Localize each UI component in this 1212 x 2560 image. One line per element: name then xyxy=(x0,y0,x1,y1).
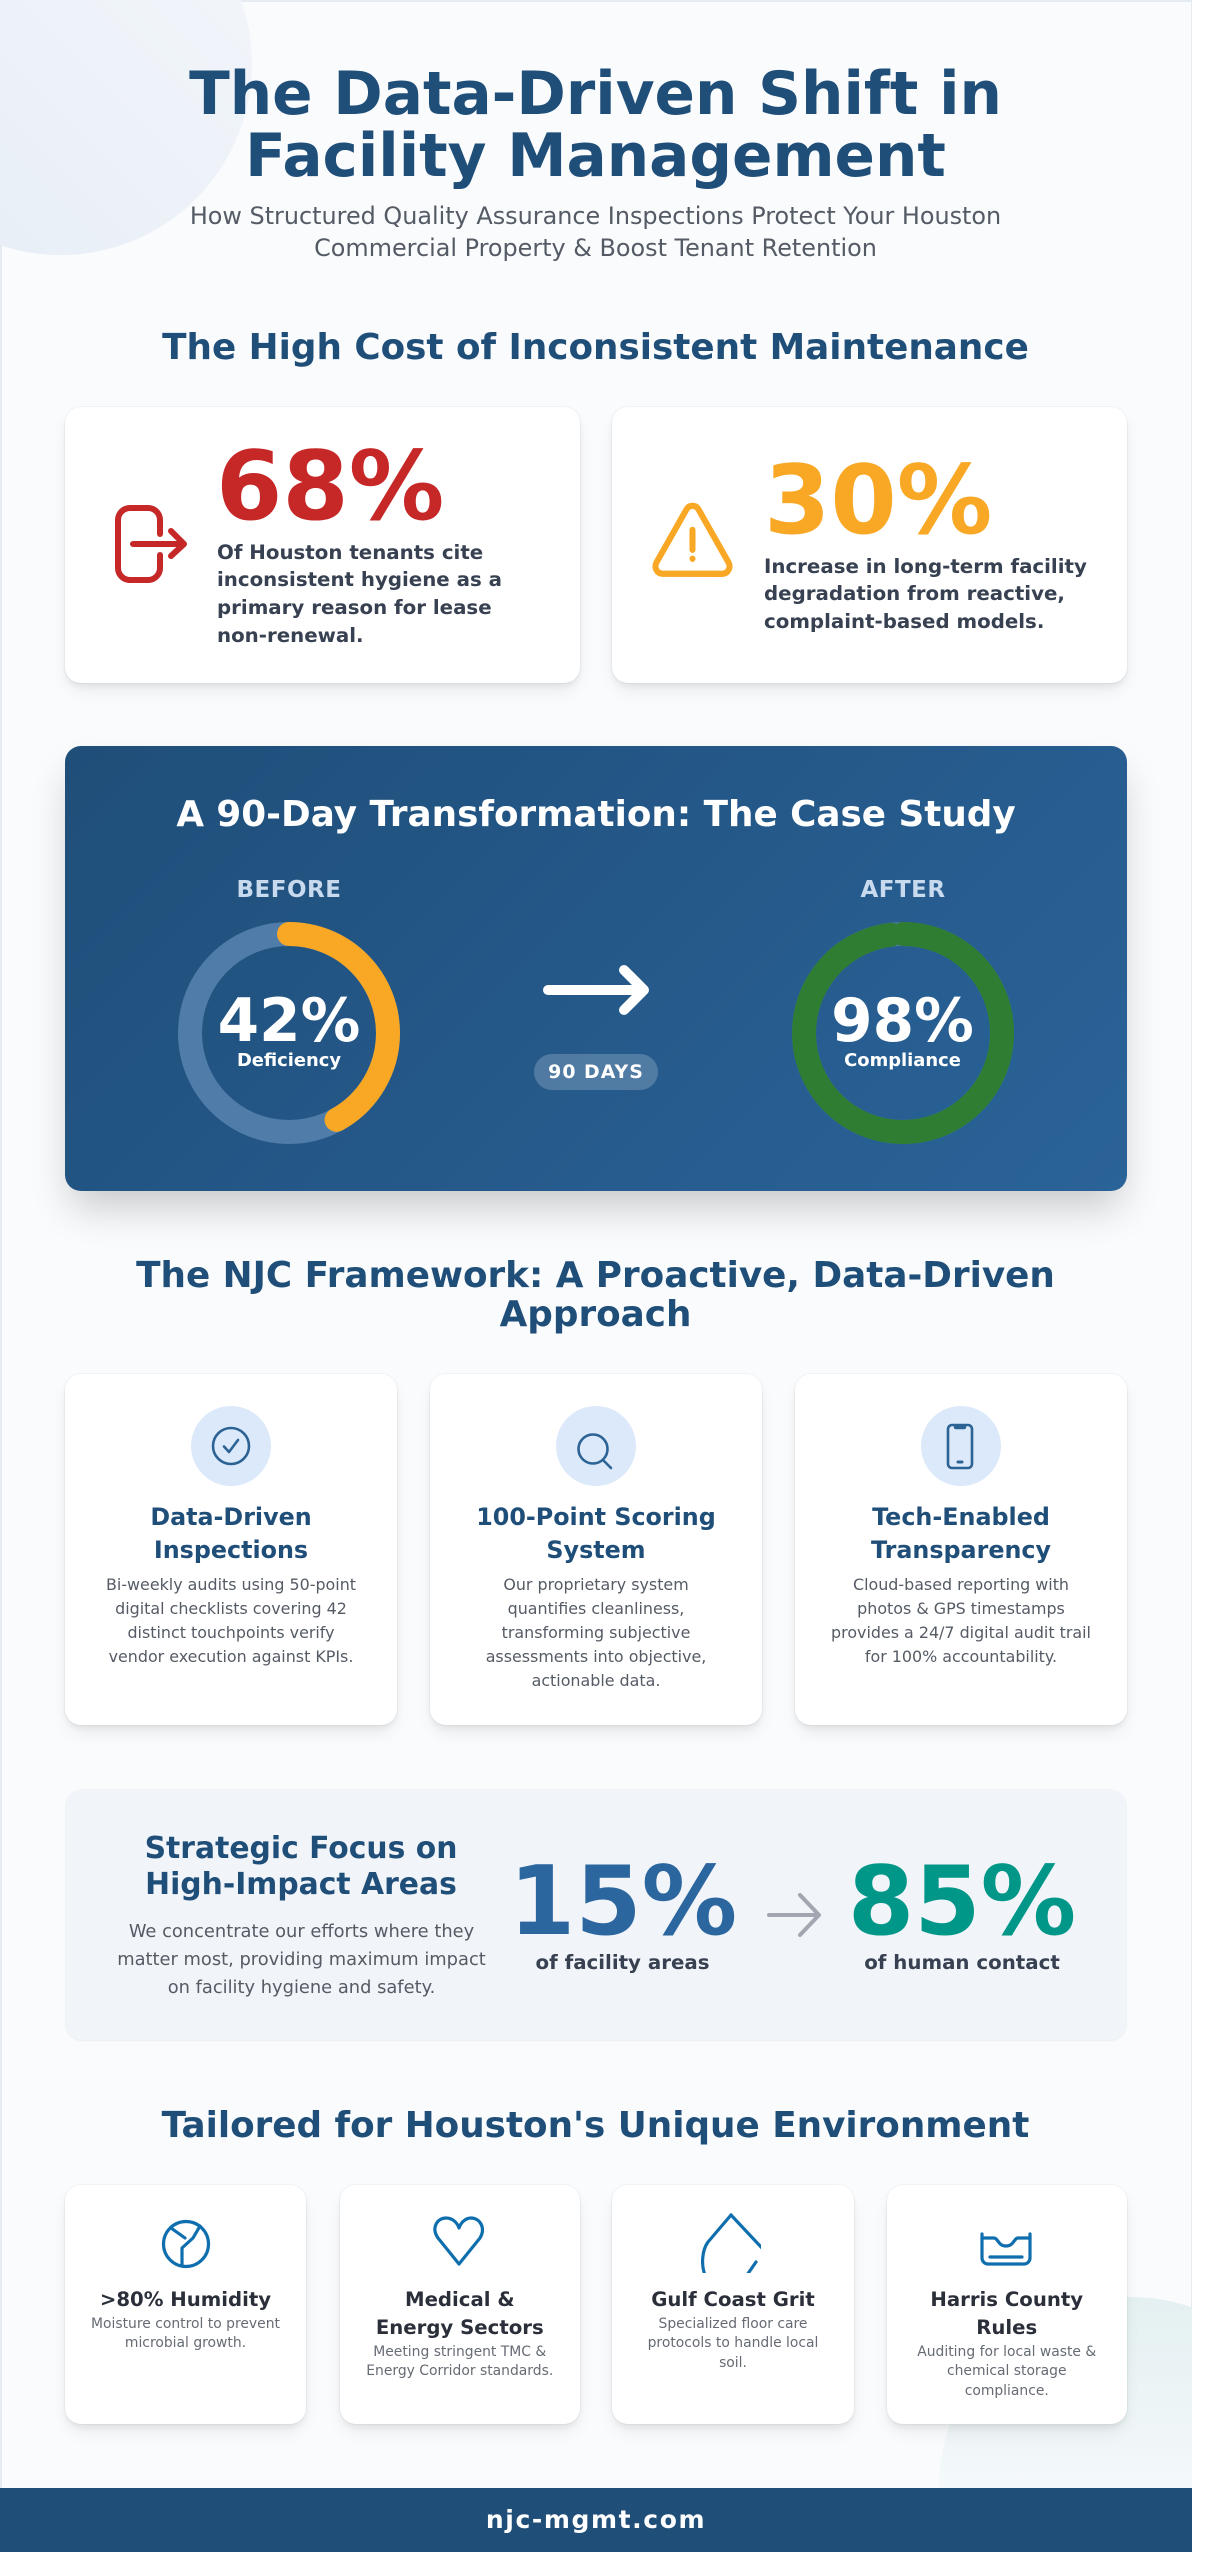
stat description: degradation from reactive, xyxy=(764,582,1065,605)
90 days pill xyxy=(534,1054,658,1090)
stat description: non-renewal. xyxy=(217,624,364,647)
before value: 42% xyxy=(218,986,360,1056)
panel: sectors xyxy=(340,2185,580,2424)
heading: framework xyxy=(136,1255,1055,1335)
icon: container xyxy=(980,2232,1032,2266)
stat description: primary reason for lease xyxy=(217,596,492,619)
card title: Harris County xyxy=(930,2288,1083,2311)
card text xyxy=(831,1575,1091,1666)
card title xyxy=(150,1503,312,1564)
card text: Moisture control to prevent xyxy=(91,2316,280,2332)
card text: protocols to handle local xyxy=(648,2335,818,2351)
icon: clipped water drop xyxy=(701,2213,761,2273)
panel: gulf coast xyxy=(612,2185,854,2424)
card text xyxy=(106,1575,356,1666)
heading: houston: Tailored for Houston's Unique Environment xyxy=(162,2104,1029,2146)
card text: Bi-weekly audits using 50-point xyxy=(106,1575,356,1594)
card title: System xyxy=(546,1536,646,1564)
card title: Gulf Coast Grit xyxy=(651,2288,815,2311)
footer: njc-mgmt.com xyxy=(486,2505,706,2534)
heading: framework: The NJC Framework: A Proactive, Data-Driven xyxy=(136,1255,1055,1296)
panel: county rules xyxy=(886,2185,1127,2424)
subtitle: How Structured Quality Assurance Inspections Protect Your Houston xyxy=(190,202,1001,230)
card text: chemical storage xyxy=(947,2363,1067,2379)
icon: heart xyxy=(433,2216,484,2266)
card text: Our proprietary system xyxy=(503,1575,689,1594)
stat description xyxy=(764,555,1087,633)
card text: actionable data. xyxy=(532,1671,660,1690)
heading: framework: Approach xyxy=(500,1294,691,1335)
card text xyxy=(648,2316,818,2371)
card title: Energy Sectors xyxy=(376,2316,544,2339)
card title xyxy=(376,2288,544,2339)
card text: Energy Corridor standards. xyxy=(366,2363,553,2379)
card title: Inspections xyxy=(154,1536,308,1564)
case study heading: A 90-Day Transformation: The Case Study xyxy=(176,794,1016,835)
card text xyxy=(366,2344,553,2379)
stat description: inconsistent hygiene as a xyxy=(217,568,502,591)
footer xyxy=(0,2488,1192,2552)
panel: data-driven inspections xyxy=(65,1374,397,1725)
icon: magnifier xyxy=(556,1406,636,1486)
panel: humidity xyxy=(65,2185,306,2424)
strategic text: matter most, providing maximum impact xyxy=(117,1949,486,1970)
card text: vendor execution against KPIs. xyxy=(109,1647,353,1666)
card title xyxy=(871,1503,1051,1564)
card text: photos & GPS timestamps xyxy=(857,1599,1065,1618)
90 days pill: 90 DAYS xyxy=(548,1060,644,1082)
icon: check circle xyxy=(191,1406,271,1486)
panel: strategic focus xyxy=(66,1790,1126,2040)
subtitle xyxy=(190,202,1001,262)
card title: Data-Driven xyxy=(150,1503,312,1531)
before label: BEFORE xyxy=(237,876,341,902)
title xyxy=(189,60,1002,191)
card title: Medical & xyxy=(405,2288,514,2311)
card text: distinct touchpoints verify xyxy=(127,1623,335,1642)
card text xyxy=(917,2344,1096,2399)
stat description: complaint-based models. xyxy=(764,610,1044,633)
card title xyxy=(930,2288,1083,2339)
icon: exit door xyxy=(115,505,187,583)
stat 85%: 85% xyxy=(848,1846,1076,1956)
decorative circle bottom-right xyxy=(939,2297,1212,2560)
stat description: Increase in long-term facility xyxy=(764,555,1087,578)
card title: 100-Point Scoring xyxy=(476,1503,716,1531)
icon: warning triangle xyxy=(652,502,733,577)
card text: digital checklists covering 42 xyxy=(115,1599,347,1618)
strategic heading xyxy=(145,1831,457,1902)
stat 15%: 15% xyxy=(509,1846,737,1956)
strategic text: We concentrate our efforts where they xyxy=(129,1921,474,1942)
stat 85% label: of human contact xyxy=(864,1951,1060,1974)
panel: scoring system xyxy=(430,1374,762,1725)
panel: case study xyxy=(65,746,1127,1191)
strategic heading: Strategic Focus on xyxy=(145,1831,457,1866)
after caption: Compliance xyxy=(844,1050,961,1071)
after label: AFTER xyxy=(860,876,946,902)
panel: transparency xyxy=(795,1374,1127,1725)
after value: 98% xyxy=(831,986,974,1056)
card text: assessments into objective, xyxy=(486,1647,706,1666)
strategic text: on facility hygiene and safety. xyxy=(168,1977,435,1998)
before caption: Deficiency xyxy=(237,1050,341,1071)
panel: tenants stat card xyxy=(65,407,580,683)
card text: Specialized floor care xyxy=(659,2316,807,2332)
card text: microbial growth. xyxy=(125,2335,246,2351)
icon: phone xyxy=(921,1406,1001,1486)
card text: Cloud-based reporting with xyxy=(853,1575,1069,1594)
card title: >80% Humidity xyxy=(100,2288,271,2311)
card text: soil. xyxy=(719,2355,747,2371)
card title: Tech-Enabled xyxy=(872,1503,1050,1531)
card title: Rules xyxy=(976,2316,1037,2339)
arrow xyxy=(543,965,649,1015)
donut: before 42% xyxy=(178,922,400,1144)
card text: Meeting stringent TMC & xyxy=(373,2344,546,2360)
stat description: Of Houston tenants cite xyxy=(217,541,483,564)
stat number: 68% xyxy=(216,431,444,542)
arrow xyxy=(767,1892,821,1938)
card text: compliance. xyxy=(965,2383,1049,2399)
title: Facility Management xyxy=(245,122,946,191)
donut: after 98% xyxy=(792,922,1014,1144)
stat description xyxy=(217,541,502,647)
heading: high cost: The High Cost of Inconsistent Maintenance xyxy=(162,327,1029,368)
decorative circle top-left xyxy=(0,0,252,255)
card text: transforming subjective xyxy=(502,1623,690,1642)
icon: leaf in circle xyxy=(162,2220,210,2268)
strategic text xyxy=(117,1921,486,1998)
strategic heading: High-Impact Areas xyxy=(145,1867,457,1902)
card title: Transparency xyxy=(871,1536,1051,1564)
card text: Auditing for local waste & xyxy=(917,2344,1096,2360)
subtitle: Commercial Property & Boost Tenant Retention xyxy=(314,234,877,262)
card text xyxy=(486,1575,706,1690)
stat 15% label: of facility areas xyxy=(536,1951,709,1974)
title: The Data-Driven Shift in xyxy=(189,60,1002,129)
card text: for 100% accountability. xyxy=(865,1647,1057,1666)
card title xyxy=(476,1503,716,1564)
panel: degradation stat card xyxy=(612,407,1127,683)
card text xyxy=(91,2316,280,2351)
stat number: 30% xyxy=(764,445,992,556)
card text: provides a 24/7 digital audit trail xyxy=(831,1623,1091,1642)
card text: quantifies cleanliness, xyxy=(508,1599,684,1618)
